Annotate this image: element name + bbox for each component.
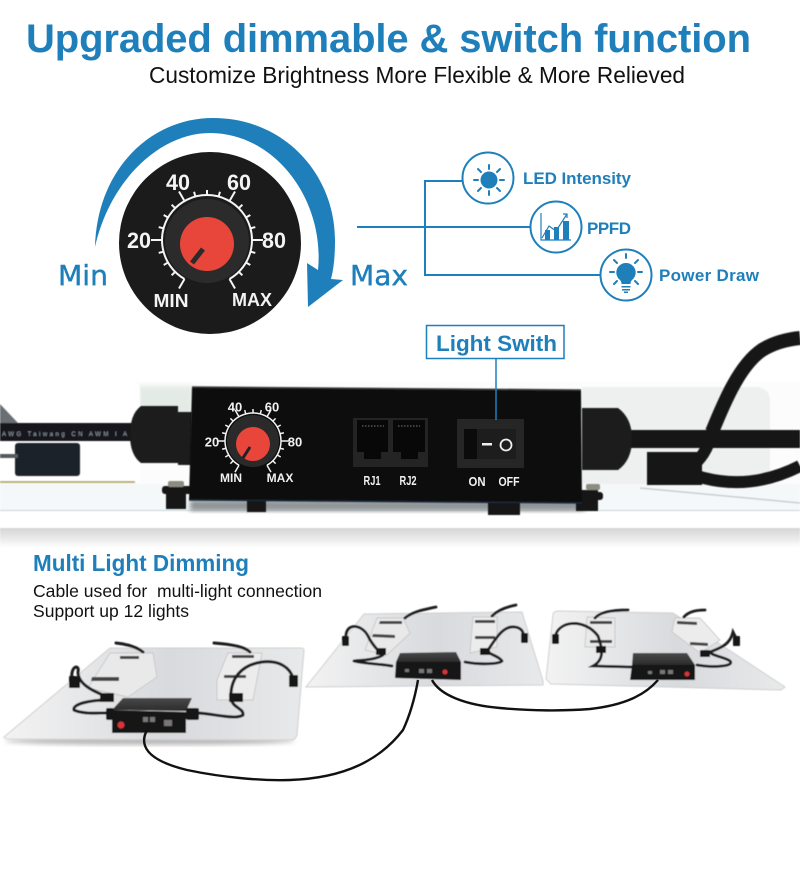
title: Upgraded dimmable & switch function [26,17,751,61]
photo: switch box on light panel [0,338,800,548]
knob [180,217,234,271]
controller [395,652,461,680]
small dial on box: 20 [205,434,219,450]
mounting screws and feet [162,481,603,515]
driver right [217,653,262,700]
cable: link panel 2 to panel 3 [432,680,658,710]
small dial on box: MAX [267,471,293,485]
cable glands [130,406,632,470]
feature: LED Intensity [462,152,632,204]
callout: Light Swith: Light Swith [436,331,557,356]
dial [119,152,301,334]
feature: Power Draw [600,250,760,300]
cables [72,643,293,717]
RJ ports: RJ2 [400,473,416,488]
cable: left with dark plug [0,404,132,476]
light panel 1 [4,643,304,745]
label: Min: Min [58,259,108,292]
dial scale labels: 80 [262,228,286,253]
arrow: min to max sweep [95,118,343,307]
light panel 3 [546,610,785,690]
rocker switch: OFF [498,474,520,489]
cables [346,605,524,666]
label: PPFD [587,219,631,238]
driver left [365,618,410,655]
label: LED Intensity [523,169,632,188]
small dial on box: 60 [265,400,279,414]
callout: Light Swith [426,326,564,420]
heading: Multi Light Dimming: Multi Light Dimming [33,550,249,576]
cable: left with dark plug: AWG Taiwang CN AWM I A [2,432,127,438]
small dial on box: MIN [220,471,242,485]
driver right [470,617,497,653]
feature: PPFD [530,202,631,252]
driver right [672,618,720,653]
controller [630,653,695,680]
connector lines [357,181,600,275]
icon: chart [530,202,582,252]
small dial on box: 40 [228,400,242,414]
text block: cable description: Support up 12 lights [33,601,189,621]
cables [555,610,737,667]
dial diagram [58,118,408,334]
dial scale labels [127,170,286,311]
RJ ports: RJ1 [364,473,380,488]
dial scale labels: MAX [232,290,272,310]
text block: cable description: Cable used for multi-light connection [33,581,322,601]
subtitle: Customize Brightness More Flexible & More Relieved [149,62,685,88]
rocker switch [457,419,524,489]
cable: right coils [630,338,800,485]
light panel 2 [306,605,543,687]
dial scale labels: MIN [154,291,188,311]
rocker switch: ON [468,474,486,489]
driver left [585,617,615,647]
cable: link panel 1 to panel 2 [144,680,418,780]
controller [106,698,199,733]
dial scale labels: 40 [166,170,190,195]
switch box [189,387,582,503]
label: Power Draw [659,266,760,285]
small dial on box [205,400,302,485]
icon: light bulb [600,250,652,300]
dial scale labels: 20 [127,228,151,253]
RJ ports [353,418,428,488]
label: Max: Max [350,259,408,292]
dial scale labels: 60 [227,170,251,195]
text block: cable description [33,581,322,621]
small dial on box: 80 [288,434,302,450]
driver left [88,653,157,697]
backdrop [0,382,800,548]
icon: sun [462,152,514,204]
